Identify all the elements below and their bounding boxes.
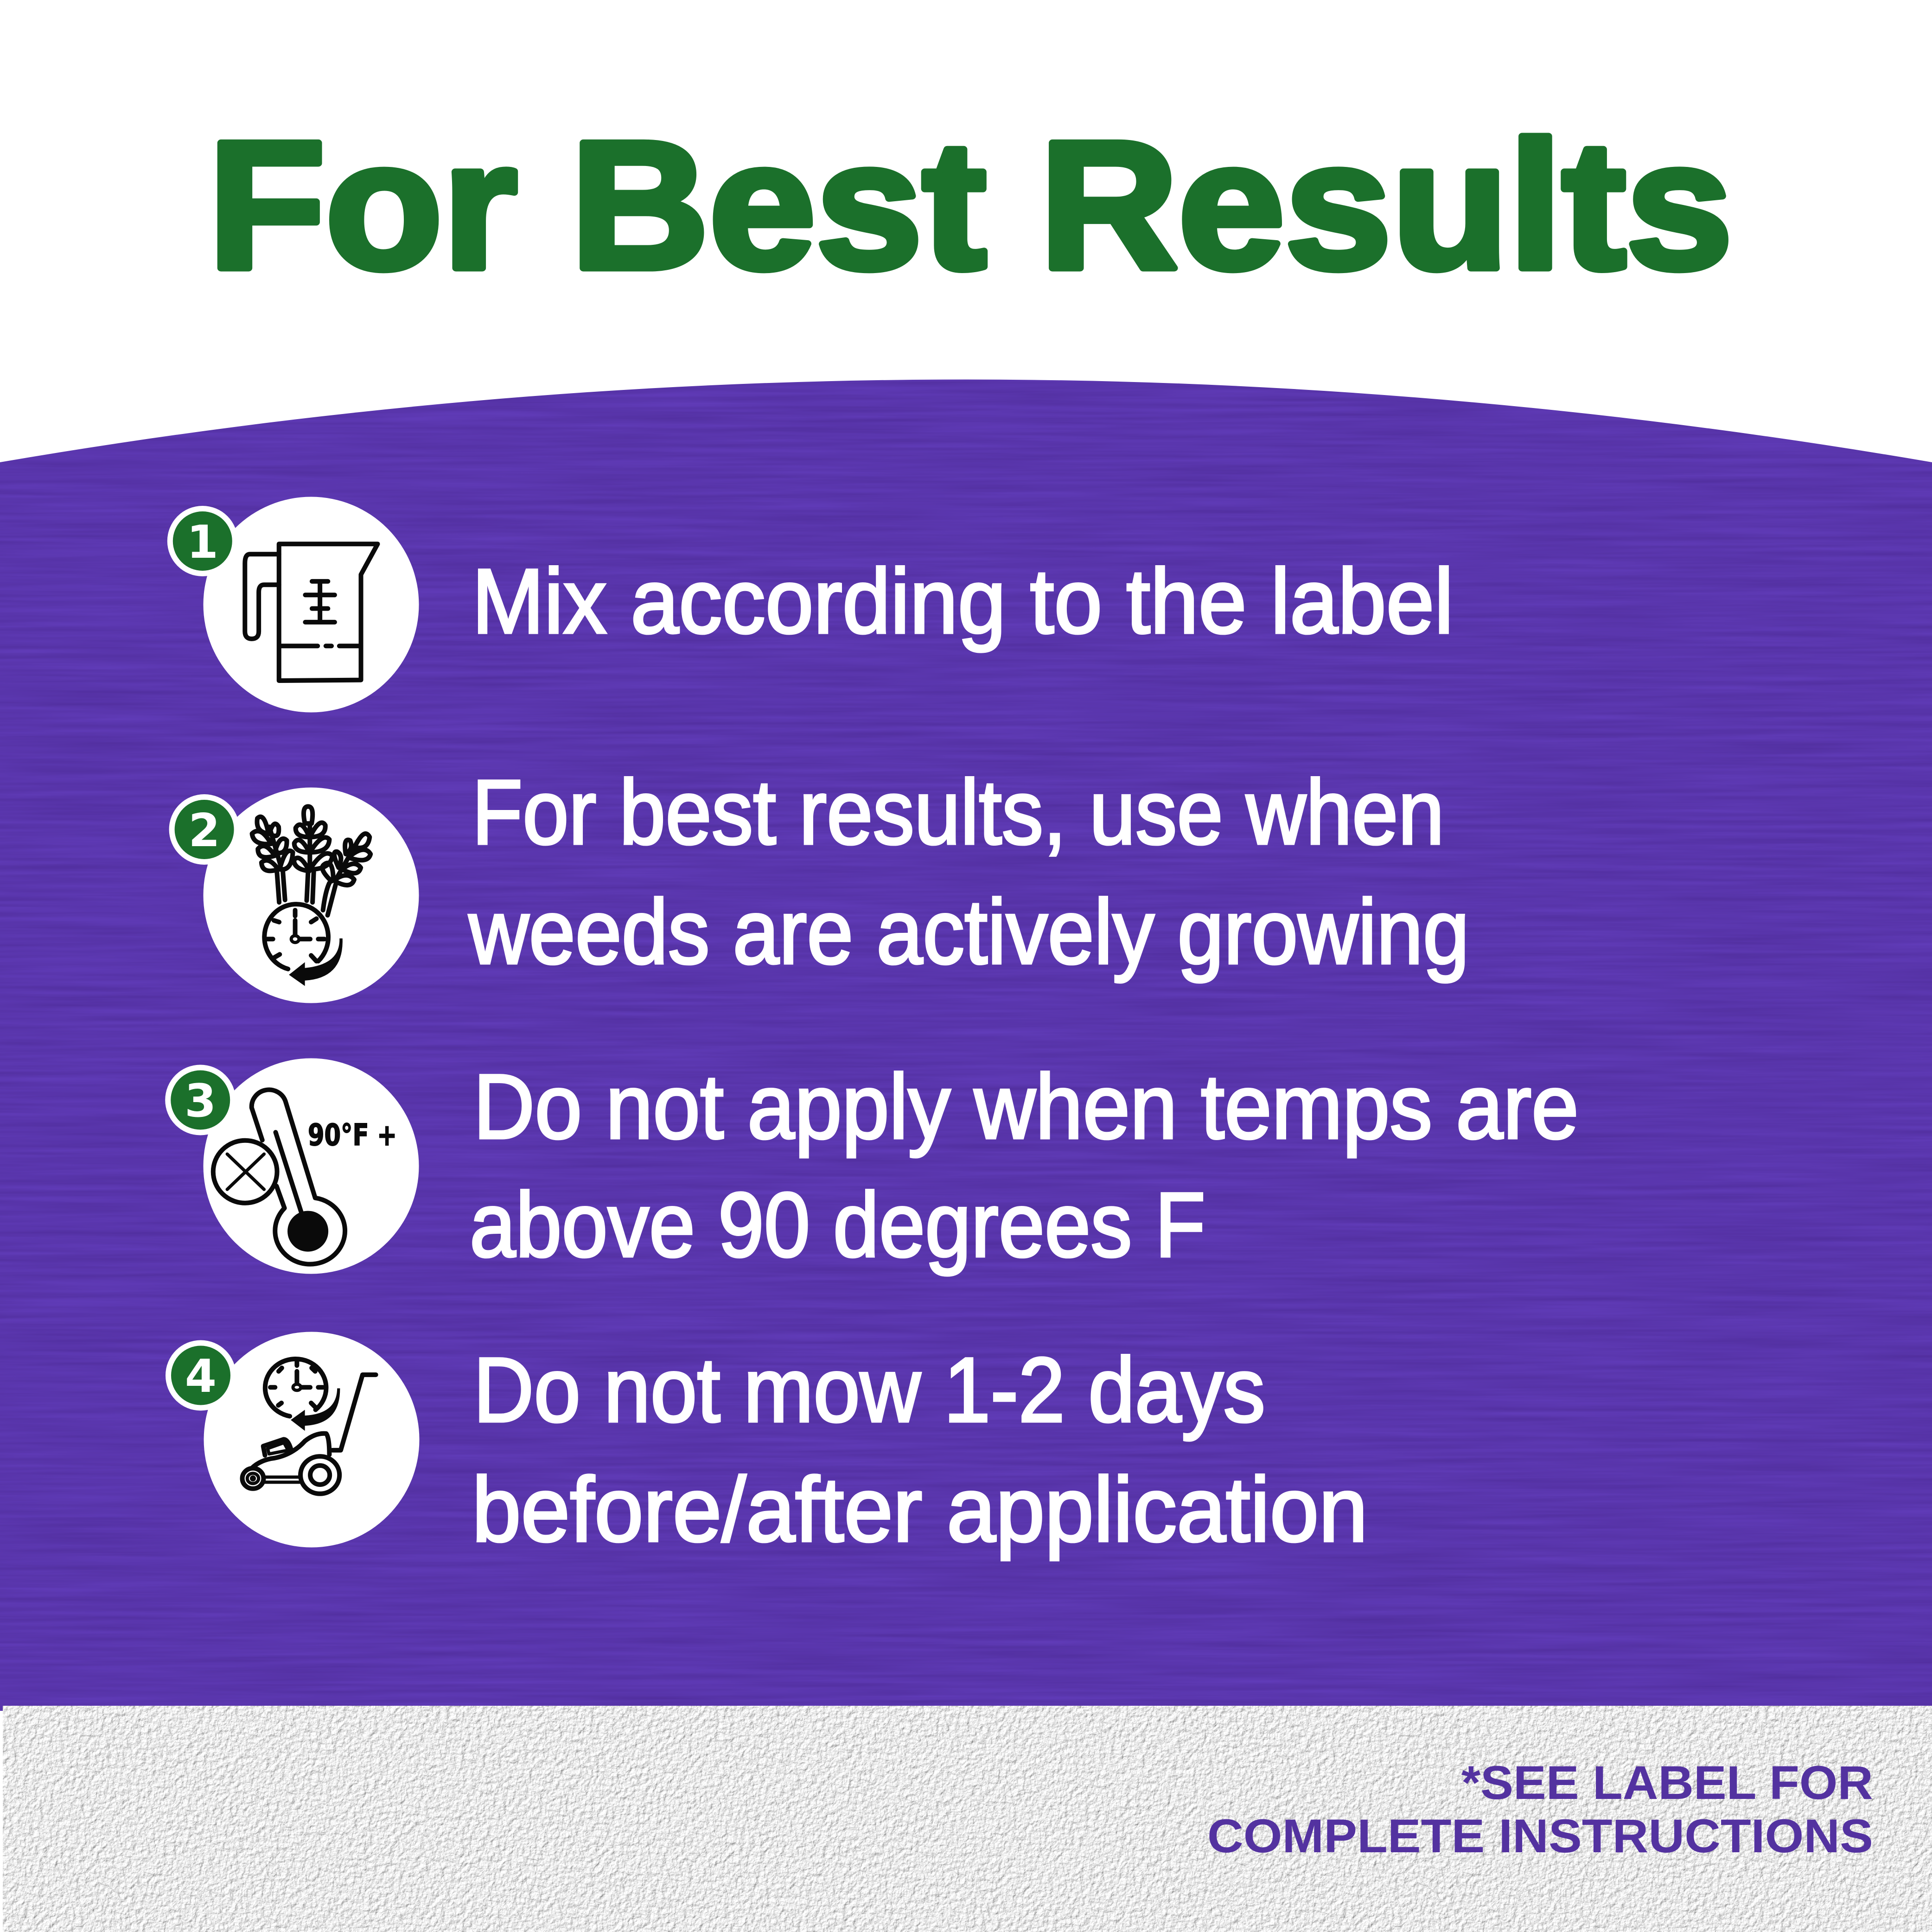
number badge 4 <box>166 1340 236 1410</box>
footnote: *SEE LABEL FOR <box>1461 1756 1873 1809</box>
step 3 text: above 90 degrees F <box>470 1173 1205 1276</box>
icon: measuring jug <box>245 544 377 681</box>
step 2 text: weeds are actively growing <box>468 880 1469 983</box>
number badge 4: 4 <box>185 1350 217 1403</box>
step 3 <box>165 1055 1579 1276</box>
step 4 text <box>472 1339 1368 1561</box>
panel: purple wood background <box>0 379 1932 1711</box>
icon: clock and lawn mower <box>242 1359 376 1494</box>
step 1 <box>167 497 1454 712</box>
icon: weeds and clock <box>252 806 370 986</box>
footnote <box>1207 1756 1873 1862</box>
icon: thermometer and cross <box>213 1090 345 1264</box>
step 3 text <box>470 1055 1579 1276</box>
step 3 icon circle <box>203 1058 419 1274</box>
step 2 text: For best results, use when <box>472 761 1444 863</box>
step 1 text: Mix according to the label <box>472 550 1454 652</box>
step 2 text <box>468 761 1469 983</box>
number badge 3 <box>165 1065 236 1135</box>
step 4 text: before/after application <box>472 1458 1368 1561</box>
step 2 icon circle <box>203 787 419 1003</box>
step 3 text: Do not apply when temps are <box>473 1055 1579 1158</box>
number badge 1 <box>167 506 238 576</box>
step 4 <box>166 1332 1368 1561</box>
number badge 2 <box>169 794 240 865</box>
number badge 1: 1 <box>187 516 218 569</box>
temperature label: 90°F + <box>308 1118 397 1153</box>
step 4 text: Do not mow 1-2 days <box>473 1339 1265 1441</box>
number badge 2: 2 <box>188 804 220 857</box>
number badge 3: 3 <box>185 1075 216 1128</box>
footnote: COMPLETE INSTRUCTIONS <box>1207 1810 1873 1862</box>
panel: textured footer band <box>3 1706 1932 1932</box>
step 2 <box>169 761 1469 1003</box>
step 4 icon circle <box>204 1332 419 1548</box>
step 1 icon circle <box>203 497 419 712</box>
title: For Best Results <box>208 104 1733 307</box>
